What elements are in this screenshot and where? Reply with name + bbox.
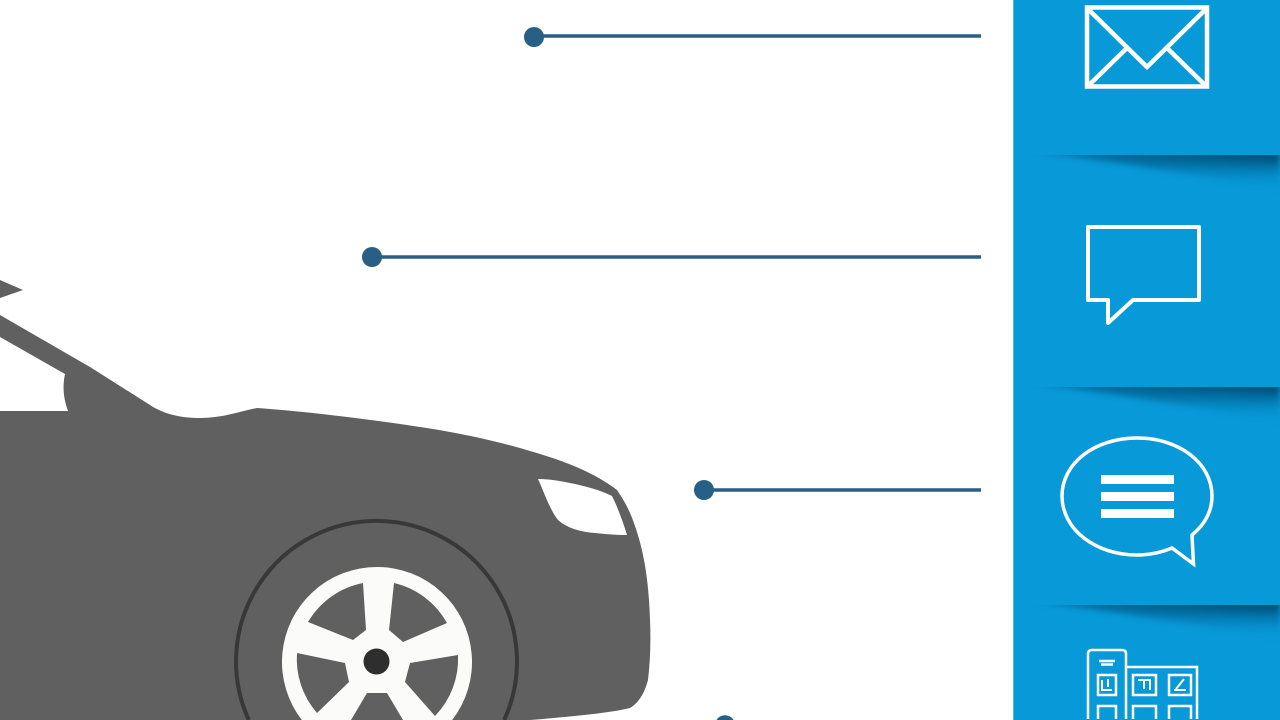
fold shadow 3 — [1047, 605, 1280, 630]
car body — [0, 315, 650, 720]
fold shadow 2 — [1047, 387, 1280, 414]
hub — [364, 648, 390, 674]
side window — [0, 337, 68, 411]
front wheel — [236, 521, 517, 720]
tire ring — [236, 521, 517, 720]
icon: envelope — [1087, 8, 1207, 86]
icon: round speech bubble with lines — [1062, 438, 1212, 564]
rim cutouts — [297, 583, 458, 720]
icon: square speech bubble — [1088, 227, 1199, 323]
callout line 1 — [524, 27, 981, 47]
car spoiler tip — [0, 280, 23, 298]
panel: contact icons sidebar — [1013, 0, 1280, 720]
fold shadow 1 — [1047, 155, 1280, 182]
car silhouette — [0, 280, 650, 720]
callout line 3 — [694, 480, 981, 500]
headlight — [538, 479, 627, 535]
rim — [282, 567, 472, 720]
callout line 2 — [362, 247, 981, 267]
callout dot 4 — [716, 715, 734, 720]
icon: office building — [1088, 650, 1197, 719]
